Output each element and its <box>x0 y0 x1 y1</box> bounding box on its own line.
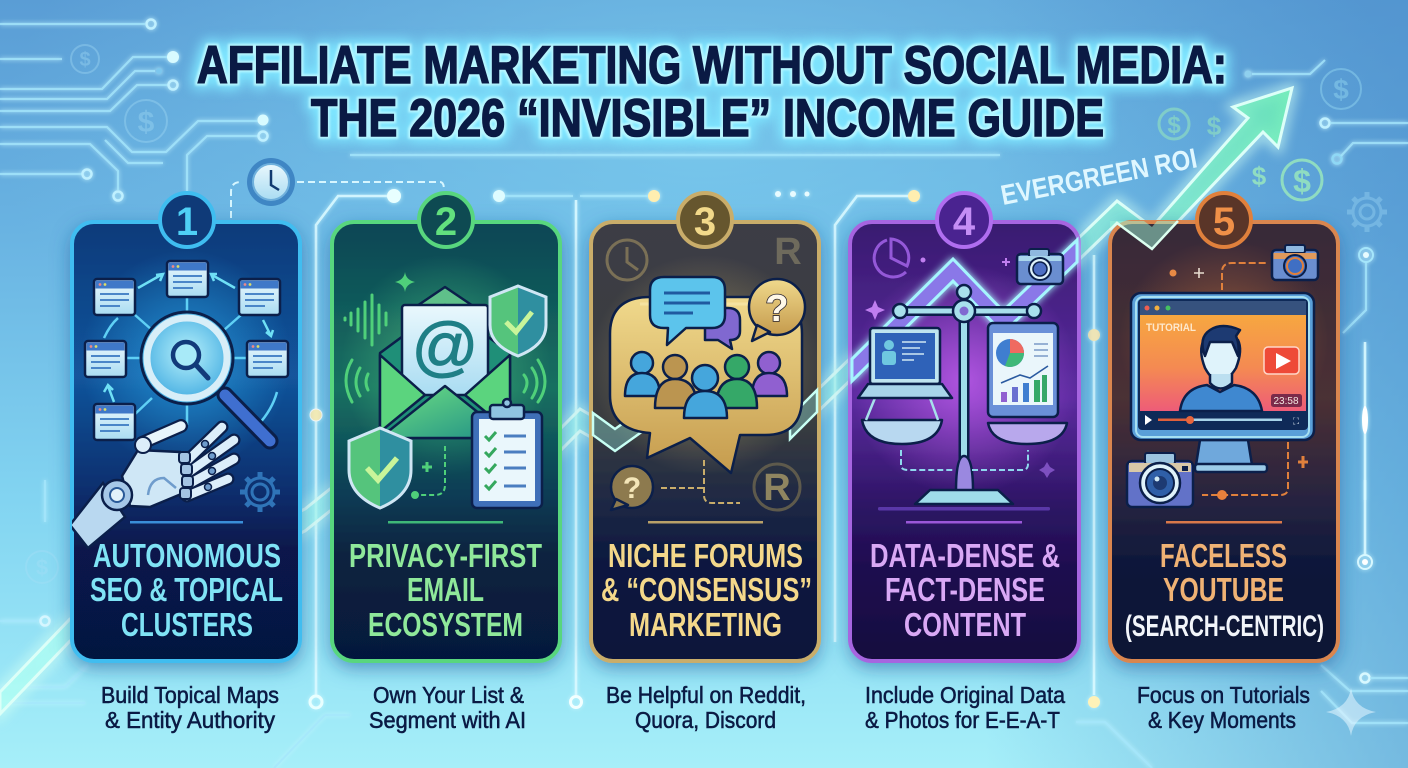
time stamp: 23:58 <box>1273 396 1299 407</box>
panel: card 5 faceless YouTube <box>1110 193 1338 661</box>
icon: right pan and tablet <box>988 323 1067 444</box>
divider <box>906 521 1022 524</box>
dollar icons right: $ <box>1167 112 1181 139</box>
card title: NICHE FORUMS <box>608 537 803 574</box>
title <box>197 36 1227 148</box>
sparkles <box>865 258 1055 478</box>
number badge 3 <box>678 193 732 247</box>
dollar icons right: $ <box>1252 161 1267 191</box>
divider <box>130 521 243 524</box>
card title: ECOSYSTEM <box>368 606 523 643</box>
number badge 2: 2 <box>435 200 457 244</box>
caption 4: & Photos for E-E-A-T <box>865 707 1060 733</box>
caption 1: Build Topical Maps <box>101 682 279 708</box>
card title: YOUTUBE <box>1163 571 1284 608</box>
panel: card 3 niche forums <box>590 193 820 661</box>
topic cluster diagram <box>85 261 288 440</box>
card title: FACT-DENSE <box>885 571 1045 608</box>
number badge 5 <box>1197 193 1251 247</box>
dashed connectors <box>231 182 444 218</box>
player controls <box>1145 415 1300 426</box>
icon: video monitor <box>1131 293 1314 472</box>
card title <box>870 537 1060 643</box>
icon: sound waves <box>345 295 545 402</box>
decorative connector <box>395 272 445 498</box>
card title: PRIVACY-FIRST <box>349 537 542 574</box>
trend segment on card <box>1110 221 1178 249</box>
divider <box>1166 521 1282 524</box>
icon: gear right <box>1347 192 1387 232</box>
card title <box>349 537 542 643</box>
icon: large camera <box>1127 453 1193 507</box>
caption 4: Include Original Data <box>865 682 1065 708</box>
caption 4 <box>865 682 1065 733</box>
card title: AUTONOMOUS <box>93 537 281 574</box>
icon: balance scale <box>893 285 1041 504</box>
circuit lines right <box>1244 60 1408 723</box>
label: tutorial: TUTORIAL <box>1146 322 1196 334</box>
icon: small camera <box>1272 245 1318 280</box>
card title: MARKETING <box>629 606 782 643</box>
icon: R logo top: R <box>774 231 802 273</box>
number badge 2 <box>419 193 473 247</box>
icon: R logo bottom: R <box>763 467 791 509</box>
dollar icon: faint left <box>26 45 167 583</box>
dollar icon: faint left: $ <box>79 49 91 71</box>
label: evergreen ROI: EVERGREEN ROI <box>998 142 1199 211</box>
icon: checklist clipboard <box>472 399 542 508</box>
icon: question bubble: ? <box>765 288 789 330</box>
dollar icons right: $ <box>1333 74 1349 105</box>
card title: FACELESS <box>1160 537 1287 574</box>
icon: small question bubble <box>611 466 653 510</box>
caption 1: & Entity Authority <box>105 707 275 733</box>
icon: forum speech bubble <box>610 297 802 473</box>
icon: clock <box>247 158 295 206</box>
caption 3: Be Helpful on Reddit, <box>606 682 806 708</box>
card title: CONTENT <box>904 606 1026 643</box>
divider <box>648 521 763 524</box>
icon: left pan and laptop <box>858 328 952 444</box>
icon: robot hand <box>70 426 234 548</box>
icon: magnifying glass <box>141 312 270 441</box>
icon: community people <box>625 352 787 418</box>
icon: sparkle <box>1326 688 1376 736</box>
dollar icons right <box>1159 69 1361 200</box>
caption 2: Own Your List & <box>373 682 524 708</box>
secondary line <box>878 507 1050 510</box>
divider <box>388 521 503 524</box>
trend segment on card <box>852 240 1077 381</box>
caption 5: Focus on Tutorials <box>1137 682 1310 708</box>
time stamp <box>1271 394 1302 407</box>
dollar icon: faint left: $ <box>138 106 155 139</box>
caption 3 <box>606 682 806 733</box>
card title: & “CONSENSUS” <box>601 571 812 608</box>
card title <box>601 537 812 643</box>
icon: small question bubble: ? <box>623 472 641 505</box>
caption 2 <box>369 682 526 733</box>
icon: camera <box>1017 249 1063 284</box>
icon: envelope with at sign: @ <box>412 309 478 383</box>
icon: R logo bottom <box>754 464 800 510</box>
number badge 3: 3 <box>694 200 716 244</box>
panel: card 1 autonomous SEO <box>70 193 300 661</box>
panel: card 4 data-dense content <box>849 193 1079 661</box>
icon: shield top right <box>490 286 546 356</box>
icon: blue chat bubble <box>650 277 725 345</box>
number badge 4 <box>937 193 991 247</box>
number badge 1: 1 <box>176 200 198 244</box>
caption 5 <box>1137 682 1310 733</box>
circuit lines center columns <box>0 189 1152 768</box>
card title <box>90 537 283 643</box>
caption 1 <box>101 682 279 733</box>
person avatar <box>1180 326 1262 411</box>
icon: shield bottom left <box>349 428 411 508</box>
number badge 4: 4 <box>953 200 976 244</box>
icon: pie chart outline <box>874 239 909 277</box>
card title: EMAIL <box>407 571 484 608</box>
card title: DATA-DENSE & <box>870 537 1060 574</box>
caption 2: Segment with AI <box>369 707 526 733</box>
card title: (SEARCH-CENTRIC) <box>1125 610 1324 643</box>
number badge 1 <box>160 193 214 247</box>
icon: clock faint <box>607 240 647 280</box>
caption 5: & Key Moments <box>1148 707 1296 733</box>
decorative connector <box>1202 263 1288 495</box>
caption 3: Quora, Discord <box>635 707 776 733</box>
dollar icon: faint left: $ <box>36 555 48 580</box>
player controls: ⛶ <box>1292 416 1300 426</box>
icon: envelope with at sign <box>380 287 510 438</box>
card title: CLUSTERS <box>121 606 253 643</box>
rising arrow: evergreen ROI trend <box>0 88 1292 714</box>
card title: SEO & TOPICAL <box>90 571 283 608</box>
number badge 5: 5 <box>1213 200 1235 244</box>
dollar icons right: $ <box>1293 163 1311 199</box>
trend segment on card <box>593 390 817 451</box>
circuit lines top left <box>0 20 1000 200</box>
title line 2: THE 2026 “INVISIBLE” INCOME GUIDE <box>311 89 1104 148</box>
decorative connector <box>661 460 740 503</box>
card title <box>1125 537 1324 643</box>
icon: gear <box>240 472 280 512</box>
panel: card 2 privacy-first email <box>332 193 560 661</box>
dollar icons right: $ <box>1207 111 1222 141</box>
decorative connector <box>901 450 1028 470</box>
icon: question bubble <box>749 279 805 341</box>
icon: purple chat bubble <box>705 308 740 349</box>
play button <box>1264 347 1299 374</box>
